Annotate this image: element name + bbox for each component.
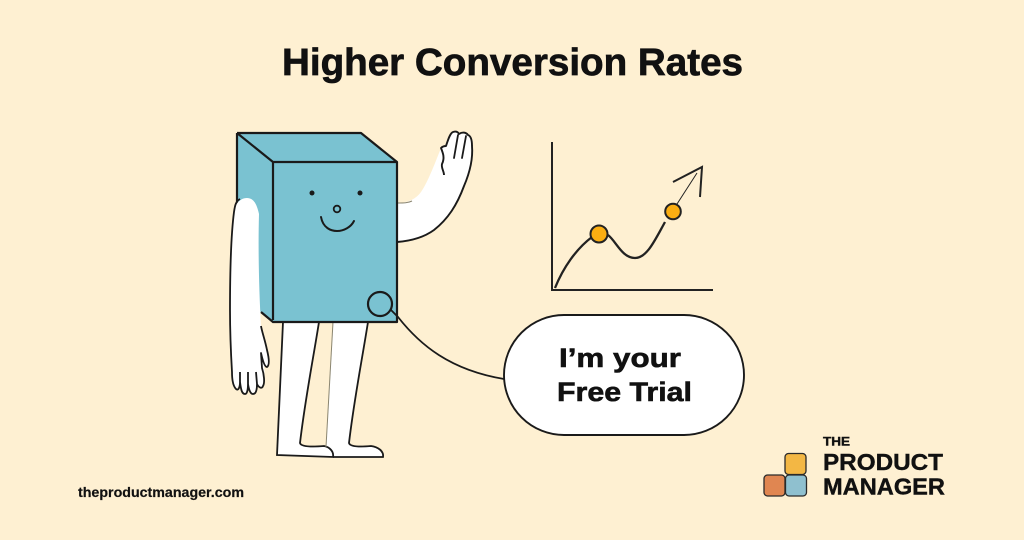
bubble text: I’m your <box>559 343 682 373</box>
arrow head <box>673 167 702 197</box>
button <box>368 292 392 316</box>
illustration: box character <box>230 132 472 457</box>
logo text: PRODUCT <box>823 449 943 475</box>
website url: theproductmanager.com <box>78 485 244 500</box>
raised right arm <box>397 132 472 242</box>
logo text: MANAGER <box>823 474 945 500</box>
logo icon: blocks <box>764 454 806 496</box>
connector line <box>391 310 504 379</box>
face <box>310 190 362 231</box>
logo text: THE <box>823 434 850 448</box>
data point 1 <box>590 226 608 242</box>
line chart <box>551 142 713 290</box>
legs <box>277 322 383 457</box>
box body <box>237 133 397 322</box>
title: Higher Conversion Rates <box>282 42 743 84</box>
logo <box>764 432 947 500</box>
bubble text: Free Trial <box>557 377 692 407</box>
left arm <box>230 198 269 394</box>
speech bubble <box>504 315 744 435</box>
data point 2 <box>665 204 681 219</box>
